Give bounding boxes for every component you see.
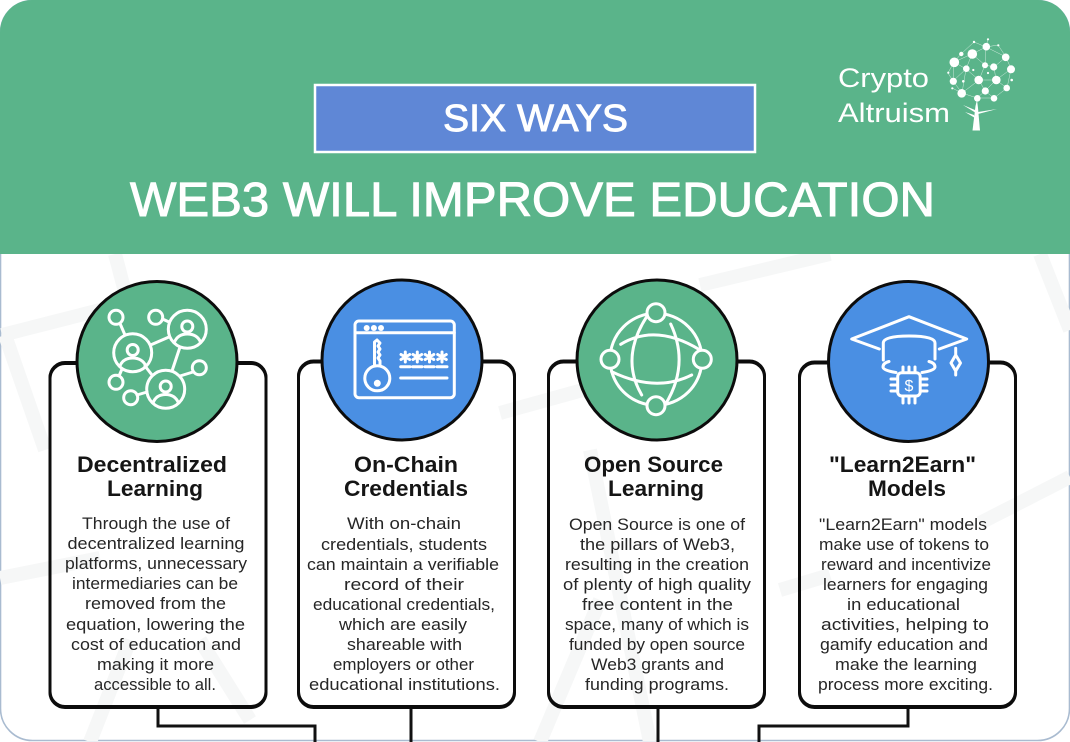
body text: [563, 515, 752, 694]
body text: which are easily: [338, 615, 468, 634]
body text: With on-chain: [347, 514, 461, 533]
body text: the pillars of Web3,: [580, 535, 735, 554]
logo wordmark: Crypto: [838, 63, 929, 93]
heading: [584, 452, 723, 501]
body text: resulting in the creation: [565, 555, 749, 574]
icon: graduation cap and chip: [828, 282, 988, 442]
body text: Web3 grants and: [591, 655, 724, 674]
panel: open source learning: [548, 280, 764, 708]
body text: employers or other: [333, 655, 474, 674]
heading: [829, 452, 976, 501]
icon: globe network: [577, 280, 737, 440]
heading: "Learn2Earn": [829, 452, 976, 477]
banner: six ways: [315, 85, 755, 152]
body text: educational credentials,: [313, 595, 495, 614]
body text: funded by open source: [569, 635, 745, 654]
body text: accessible to all.: [94, 675, 216, 694]
body text: funding programs.: [585, 675, 729, 694]
body text: [307, 514, 500, 694]
body text: platforms, unnecessary: [65, 554, 248, 573]
heading: Credentials: [344, 476, 468, 501]
body text: free content in the: [582, 595, 733, 614]
dollar sign: $: [905, 378, 914, 395]
body text: of plenty of high quality: [563, 575, 752, 594]
heading: Learning: [107, 476, 203, 501]
body text: in educational: [847, 595, 960, 614]
panel: decentralized learning: [50, 282, 266, 708]
body text: space, many of which is: [565, 615, 749, 634]
connector lines: [158, 707, 908, 742]
body text: activities, helping to: [821, 615, 989, 634]
body text: decentralized learning: [68, 534, 244, 553]
title: WEB3 WILL IMPROVE EDUCATION: [130, 174, 935, 227]
body text: credentials, students: [321, 535, 487, 554]
body text: cost of education and: [71, 635, 241, 654]
heading: Decentralized: [77, 452, 227, 477]
body text: shareable with: [347, 635, 462, 654]
heading: On-Chain: [354, 452, 458, 477]
body text: make the learning: [835, 655, 977, 674]
body text: learners for engaging: [823, 575, 988, 594]
body text: intermediaries can be: [72, 574, 238, 593]
logo wordmark: [838, 63, 950, 128]
body text: Through the use of: [82, 514, 230, 533]
body text: [818, 515, 993, 694]
body text: Open Source is one of: [569, 515, 745, 534]
heading: Learning: [608, 476, 704, 501]
body text: make use of tokens to: [819, 535, 989, 554]
icon: credentials window and key: [322, 280, 482, 440]
logo: Crypto Altruism: [838, 38, 1015, 131]
body text: can maintain a verifiable: [307, 555, 499, 574]
heading: Open Source: [584, 452, 723, 477]
body text: process more exciting.: [818, 675, 993, 694]
body text: equation, lowering the: [66, 615, 245, 634]
body text: educational institutions.: [309, 675, 500, 694]
body text: making it more: [97, 655, 214, 674]
panel: on-chain credentials: [298, 280, 514, 708]
icon: network tree: [947, 38, 1015, 131]
panel: learn2earn models: [800, 282, 1016, 708]
banner: six ways: SIX WAYS: [443, 98, 628, 140]
body text: "Learn2Earn" models: [819, 515, 987, 534]
body text: [65, 514, 248, 694]
heading: [77, 452, 227, 501]
body text: gamify education and: [820, 635, 988, 654]
heading: Models: [868, 476, 946, 501]
header band: [0, 0, 1070, 254]
body text: record of their: [344, 575, 464, 594]
icon: peer network: [77, 282, 237, 442]
logo wordmark: Altruism: [838, 98, 950, 128]
body text: reward and incentivize: [821, 555, 991, 574]
body text: removed from the: [85, 594, 226, 613]
heading: [344, 452, 468, 501]
